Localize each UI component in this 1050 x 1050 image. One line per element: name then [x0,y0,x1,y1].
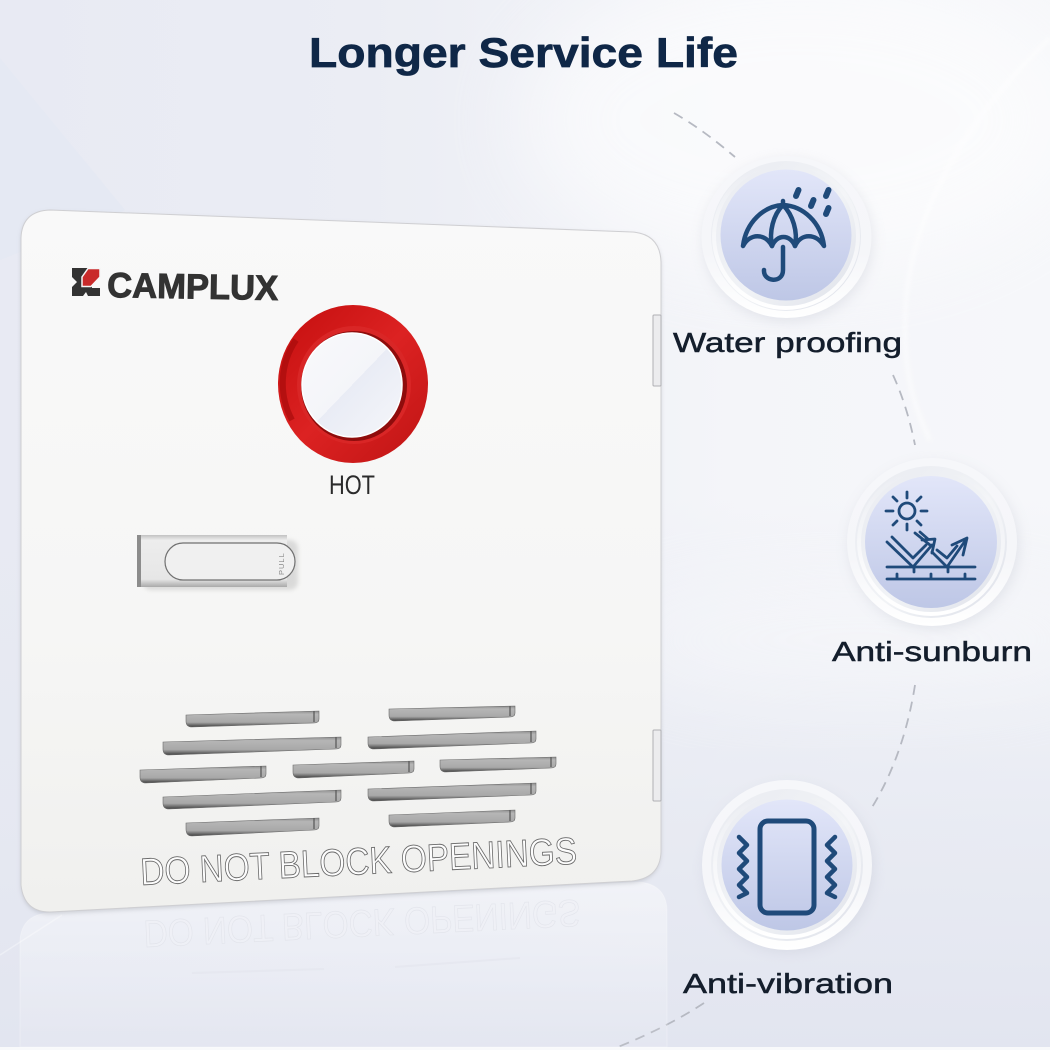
hot label: HOT [329,470,375,500]
panel reflection [20,882,667,1047]
badge: anti-sunburn [847,458,1018,628]
warning text: DO NOT BLOCK OPENINGS [139,831,578,894]
reflected vent slots [192,958,520,973]
label: anti-sunburn: Anti-sunburn [832,636,1032,667]
vent slots [140,706,556,836]
label: anti-vibration: Anti-vibration [683,968,893,999]
connector: bottom dashed line [618,1003,704,1047]
icon: vibrating device [739,821,835,913]
badge: anti-vibration [702,780,873,951]
icon: umbrella in rain [743,190,828,280]
badge: water proofing [702,156,872,321]
reflected warning text: DO NOT BLOCK OPENINGS [143,891,581,954]
connector: water to sun dashed line [893,375,915,445]
right hinge tabs [653,315,661,801]
pull text: PULL [277,552,286,575]
connector: top dashed line [674,113,735,157]
logo wordmark: CAMPLUX [107,266,279,308]
logo mark [72,268,100,296]
label: water proofing: Water proofing [673,327,902,358]
hot indicator ring [278,305,428,463]
panel: access door [21,210,661,914]
connector: sun to vibration dashed line [869,685,915,812]
logo: Camplux [72,266,279,308]
pull latch [137,535,298,590]
icon: sun rays reflecting off surface [886,492,975,579]
title: Longer Service Life [309,29,738,76]
